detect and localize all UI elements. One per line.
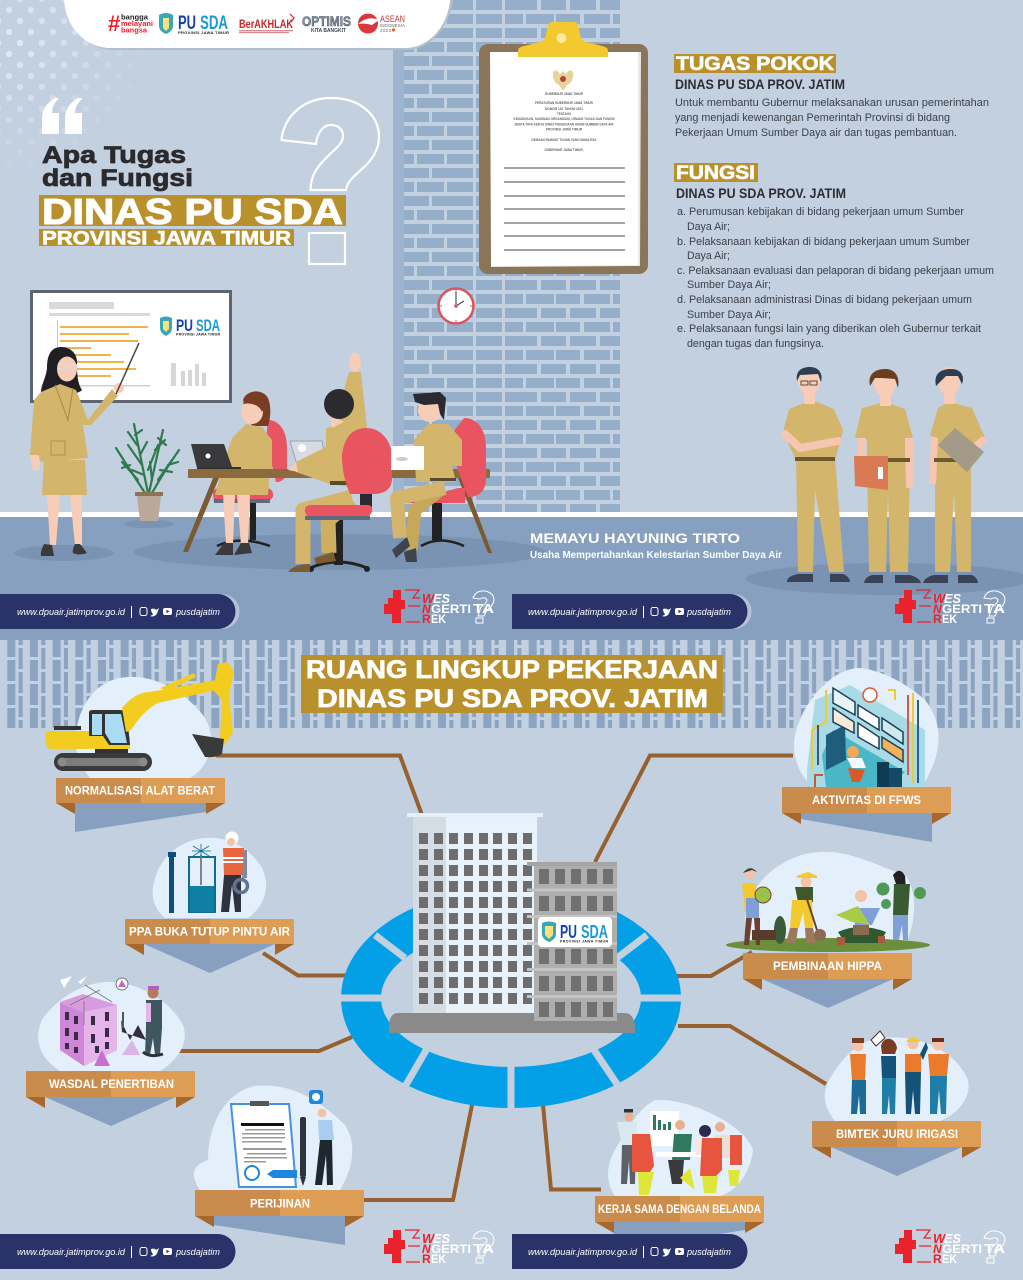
ribbon: Normalisasi Alat Berat: NORMALISASI ALAT BERAT: [65, 784, 216, 798]
footer bar: website and social, bottom left: pusdajatim: [175, 1247, 220, 1258]
title: Apa Tugas dan Fungsi: [42, 142, 193, 192]
icon: control room: [807, 685, 925, 787]
chair: [360, 490, 372, 507]
icon: outlined question mark: [282, 98, 379, 264]
officer with crossed arms: [783, 367, 850, 582]
campaign mark: Wes Ngerti Ta Rek, bottom right: TA: [984, 1241, 1006, 1256]
logo: bangga melayani bangsa: #: [108, 11, 120, 36]
campaign mark: Wes Ngerti Ta Rek, top right: GERTI: [942, 602, 982, 616]
PU SDA logo on board: PROVINSI JAWA TIMUR: [176, 332, 220, 336]
decree text: SERTA TATA KERJA DINAS PEKERJAAN UMUM SUMBER DAYA AIR: [514, 122, 614, 126]
slogan: Memayu Hayuning Tirto: MEMAYU HAYUNING TIRTO: [530, 530, 740, 546]
campaign mark: Wes Ngerti Ta Rek, bottom left: [384, 1230, 495, 1266]
text block: Fungsi list: e. Pelaksanaan fungsi lain yang diberikan oleh Gubernur terkait: [677, 323, 981, 335]
icon: wall clock: [438, 288, 474, 324]
campaign mark: Wes Ngerti Ta Rek, top right: W: [933, 591, 947, 606]
campaign mark: Wes Ngerti Ta Rek, top left: [384, 590, 495, 626]
item: Kerja Sama Dengan Belanda: [595, 1100, 764, 1234]
ribbon: Perijinan: [195, 1190, 364, 1245]
campaign mark: Wes Ngerti Ta Rek, top left: EK: [431, 612, 446, 626]
text block: Tugas Pokok description: Pekerjaan Umum Sumber Daya air dan tugas pembantuan.: [675, 127, 957, 139]
item: PPA Buka Tutup Pintu Air: [125, 832, 294, 973]
campaign mark: Wes Ngerti Ta Rek, bottom left: N: [422, 1242, 431, 1256]
slogan: Memayu Hayuning Tirto: Usaha Mempertahankan Kelestarian Sumber Daya Air: [530, 549, 782, 561]
item: Pembinaan HIPPA: [726, 852, 930, 1008]
text block: Tugas Pokok description: Untuk membantu Gubernur melaksanakan urusan pemerintahan: [675, 97, 989, 109]
item: Aktivitas di FFWS: [782, 685, 951, 842]
blob backdrop: [608, 1100, 753, 1196]
icon: document, pen and man: [231, 1090, 334, 1187]
ribbon: Bimtek Juru Irigasi: [812, 1121, 981, 1176]
campaign mark: Wes Ngerti Ta Rek, top left: GERTI: [431, 602, 471, 616]
campaign mark: Wes Ngerti Ta Rek, bottom right: EK: [942, 1252, 957, 1266]
title: Apa Tugas dan Fungsi: Apa Tugas: [42, 142, 186, 169]
logo: ASEAN Indonesia 2023: 2023: [380, 28, 391, 33]
footer bar: website and social, bottom left: [0, 1234, 236, 1269]
footer bar: website and social, bottom right: [512, 1234, 748, 1269]
campaign mark: Wes Ngerti Ta Rek, bottom left: ES: [433, 1231, 450, 1246]
ribbon: Kerja Sama Dengan Belanda: KERJA SAMA DENGAN BELANDA: [598, 1202, 761, 1216]
logo: PU SDA: [159, 13, 229, 35]
campaign mark: Wes Ngerti Ta Rek, bottom right: GERTI: [942, 1242, 982, 1256]
logo: bangga melayani bangsa: melayani: [121, 19, 153, 28]
icon: meeting scene: [617, 1109, 742, 1195]
blob: normalisasi backdrop: [76, 677, 211, 778]
figure: man raising hand in red chair: [288, 353, 392, 572]
floor with skirting: [0, 512, 1023, 640]
footer bar: website and social, top right: pusdajatim: [686, 607, 731, 618]
footer bar: website and social, bottom left: www.dpuair.jatimprov.go.id: [17, 1247, 126, 1258]
text block: Tugas Pokok description: yang menjadi kewenangan Pemerintah Provinsi di bidang: [675, 112, 950, 124]
heading: Tugas Pokok: TUGAS POKOK: [676, 53, 834, 75]
ribbon: Kerja Sama Dengan Belanda: [595, 1196, 764, 1234]
decree text: DENGAN RAHMAT TUHAN YANG MAHA ESA: [532, 138, 597, 142]
ribbon: Pembinaan HIPPA: [743, 953, 912, 1008]
text block: Fungsi list: Daya Air;: [687, 250, 730, 262]
plinth: [389, 1013, 635, 1033]
dotted halftone corner: [0, 0, 111, 145]
campaign mark: Wes Ngerti Ta Rek, top right: EK: [942, 612, 957, 626]
campaign mark: Wes Ngerti Ta Rek, bottom right: W: [933, 1231, 947, 1246]
ribbon: Wasdal Penertiban: WASDAL PENERTIBAN: [49, 1077, 174, 1091]
decree text: [514, 92, 614, 152]
footer bar: website and social, top right: www.dpuair.jatimprov.go.id: [528, 607, 638, 618]
text block: Fungsi list: c. Pelaksanaan evaluasi dan pelaporan di bidang pekerjaan umum: [677, 265, 994, 277]
blue segmented ring: [335, 888, 687, 1115]
PU SDA logo on board: [160, 316, 220, 336]
campaign mark: Wes Ngerti Ta Rek, top left: ES: [433, 591, 450, 606]
ribbon: PPA Buka Tutup Pintu Air: PPA BUKA TUTUP PINTU AIR: [129, 924, 290, 938]
laptop: [191, 444, 232, 468]
logo: ASEAN Indonesia 2023: [358, 14, 405, 34]
quotation mark: [42, 98, 83, 134]
campaign mark: Wes Ngerti Ta Rek, bottom right: N: [933, 1242, 942, 1256]
ribbon: Pembinaan HIPPA: PEMBINAAN HIPPA: [773, 959, 882, 973]
ribbon: Aktivitas di FFWS: AKTIVITAS DI FFWS: [812, 793, 921, 807]
campaign mark: Wes Ngerti Ta Rek, bottom right: [895, 1230, 1006, 1266]
decree text: GUBERNUR JAWA TIMUR: [545, 92, 583, 96]
figure group: three standing officers: [783, 367, 988, 583]
building sign: PU SDA: PU: [560, 922, 577, 942]
logo: Optimis: [302, 13, 351, 34]
building sign: PU SDA: PROVINSI JAWA TIMUR: [560, 940, 608, 944]
decree text: PROVINSI JAWA TIMUR: [546, 128, 582, 132]
logo: bangga melayani bangsa: bangsa: [121, 26, 148, 34]
bar lines chart: [57, 320, 148, 385]
document rules: [504, 168, 625, 250]
icon: damaged building and worker: [60, 976, 163, 1066]
footer bar: website and social, top left: www.dpuair.jatimprov.go.id: [17, 607, 126, 618]
blob backdrop: [825, 1037, 969, 1121]
header logo strip: [64, 0, 453, 50]
text block: Fungsi list: Sumber Daya Air;: [687, 279, 771, 291]
campaign mark: Wes Ngerti Ta Rek, top left: TA: [473, 601, 495, 616]
campaign mark: Wes Ngerti Ta Rek, top right: R: [933, 612, 942, 626]
campaign mark: Wes Ngerti Ta Rek, top right: N: [933, 602, 942, 616]
text block: Fungsi list: a. Perumusan kebijakan di bidang pekerjaan umum Sumber: [677, 206, 964, 218]
figure: seated man with laptop: [391, 392, 486, 562]
ribbon: Normalisasi Alat Berat: [56, 778, 225, 832]
ribbon: Perijinan: PERIJINAN: [250, 1196, 310, 1210]
ribbon: PPA Buka Tutup Pintu Air: [125, 919, 294, 973]
icon: water gate and worker: [168, 832, 248, 913]
item: Bimtek Juru Irigasi: [812, 1031, 981, 1176]
campaign mark: Wes Ngerti Ta Rek, top left: N: [422, 602, 431, 616]
blob backdrop: [38, 982, 185, 1071]
title highlight: PROVINSI JAWA TIMUR: PROVINSI JAWA TIMUR: [42, 228, 291, 250]
campaign mark: Wes Ngerti Ta Rek, bottom left: TA: [473, 1241, 495, 1256]
logo: PU SDA: PROVINSI JAWA TIMUR: [178, 30, 229, 35]
logo: Optimis: OPTIMIS: [302, 13, 351, 29]
item: Wasdal Penertiban: [26, 976, 195, 1126]
text block: Fungsi list: Sumber Daya Air;: [687, 309, 771, 321]
connector lines to central building: [178, 756, 826, 1200]
item: Normalisasi Alat Berat: [45, 662, 234, 832]
campaign mark: Wes Ngerti Ta Rek, top right: TA: [984, 601, 1006, 616]
lower section vertical brick band: [0, 640, 1023, 728]
presentation whiteboard: [32, 292, 230, 402]
annex block: [534, 864, 617, 1021]
footer bar: website and social, bottom right: pusdajatim: [686, 1247, 731, 1258]
decree text: PERATURAN GUBERNUR JAWA TIMUR: [535, 101, 593, 105]
figure: seated woman with laptop: [191, 391, 287, 555]
logo: bangga melayani bangsa: bangga: [121, 12, 149, 22]
footer bar: website and social, top right: [512, 594, 752, 629]
logo: bangga melayani bangsa: [108, 11, 153, 36]
small grey bar chart: [171, 363, 206, 386]
campaign mark: Wes Ngerti Ta Rek, bottom left: EK: [431, 1252, 446, 1266]
logo: ASEAN Indonesia 2023: INDONESIA: [380, 23, 405, 28]
item: Perijinan: [194, 1085, 364, 1245]
raised arm and torso: [334, 372, 367, 428]
subheading: Dinas PU SDA Prov. Jatim: DINAS PU SDA PROV. JATIM: [676, 185, 846, 201]
campaign mark: Wes Ngerti Ta Rek, bottom left: GERTI: [431, 1242, 471, 1256]
campaign mark: Wes Ngerti Ta Rek, top right: [895, 590, 1006, 626]
text block: Fungsi list: Daya Air;: [687, 221, 730, 233]
officer with tablet: [923, 367, 988, 583]
icon: excavator: [45, 662, 234, 771]
tower windows: [419, 833, 532, 1004]
footer bar: website and social, top left: [0, 594, 240, 629]
logo: ASEAN Indonesia 2023: ASEAN: [380, 14, 405, 24]
text block: Tugas Pokok description: [675, 97, 989, 139]
decree text: NOMOR 102 TAHUN 2021: [545, 107, 583, 111]
PU SDA logo on board: PU: [176, 316, 193, 335]
text block: Fungsi list: [677, 206, 994, 350]
clipboard with decree document: [479, 22, 648, 274]
blob backdrop: [153, 838, 266, 918]
campaign mark: Wes Ngerti Ta Rek, top left: W: [422, 591, 436, 606]
ribbon: Bimtek Juru Irigasi: BIMTEK JURU IRIGASI: [836, 1127, 958, 1141]
campaign mark: Wes Ngerti Ta Rek, bottom left: R: [422, 1252, 431, 1266]
icon: four engineers: [850, 1031, 949, 1114]
heading: Fungsi: FUNGSI: [676, 162, 755, 184]
title: Ruang Lingkup Pekerjaan: DINAS PU SDA PROV. JATIM: [317, 685, 708, 713]
building sign: PU SDA: SDA: [581, 922, 608, 942]
logo: PU SDA: PU: [178, 13, 196, 34]
campaign mark: Wes Ngerti Ta Rek, bottom right: ES: [944, 1231, 961, 1246]
icon: potted plant: [116, 424, 179, 521]
ribbon: Wasdal Penertiban: [26, 1071, 195, 1126]
blob: aktivitas backdrop: [794, 668, 939, 787]
subheading: Dinas PU SDA Prov. Jatim: DINAS PU SDA PROV. JATIM: [675, 76, 845, 92]
text block: Fungsi list: dengan tugas dan fungsinya.: [687, 338, 824, 350]
logo: BerAKHLAK: [239, 14, 294, 33]
figure: presenter woman: [30, 343, 139, 556]
ribbon: Aktivitas di FFWS: [782, 787, 951, 842]
campaign mark: Wes Ngerti Ta Rek, top left: R: [422, 612, 431, 626]
central building: [389, 813, 635, 1033]
slogan: Memayu Hayuning Tirto: [530, 530, 782, 561]
title: Ruang Lingkup Pekerjaan: RUANG LINGKUP PEKERJAAN: [306, 656, 718, 684]
text block: Fungsi list: b. Pelaksanaan kebijakan di bidang pekerjaan umum Sumber: [677, 236, 970, 248]
brick wall column: [393, 0, 620, 512]
PU SDA logo on board: SDA: [196, 316, 220, 335]
blob backdrop: [194, 1085, 352, 1190]
text block: Fungsi list: d. Pelaksanaan administrasi Dinas di bidang pekerjaan umum: [677, 294, 972, 306]
title: Ruang Lingkup Pekerjaan: [301, 655, 723, 713]
title: Apa Tugas dan Fungsi: dan Fungsi: [42, 165, 193, 192]
decree text: TENTANG: [557, 112, 571, 116]
icon: clip: [518, 22, 608, 57]
campaign mark: Wes Ngerti Ta Rek, bottom left: W: [422, 1231, 436, 1246]
officer with orange folder: [854, 369, 921, 583]
table: [183, 469, 492, 553]
campaign mark: Wes Ngerti Ta Rek, top right: ES: [944, 591, 961, 606]
campaign mark: Wes Ngerti Ta Rek, bottom right: R: [933, 1252, 942, 1266]
decree text: GUBERNUR JAWA TIMUR,: [544, 148, 584, 152]
legs: [328, 500, 352, 553]
logo: BerAKHLAK: BerAKHLAK: [239, 19, 294, 31]
icon: garuda emblem: [553, 70, 573, 91]
logo: Optimis: KITA BANGKIT: [311, 28, 347, 34]
blob backdrop: [745, 852, 914, 945]
icon: gardening scene: [726, 868, 930, 952]
logo: PU SDA: SDA: [200, 13, 228, 34]
decree text: KEDUDUKAN, SUSUNAN ORGANISASI, URAIAN TUGAS DAN FUNGSI: [514, 117, 614, 121]
building sign: PU SDA: [538, 917, 612, 947]
footer bar: website and social, top left: pusdajatim: [175, 607, 220, 618]
footer bar: website and social, bottom right: www.dpuair.jatimprov.go.id: [528, 1247, 638, 1258]
title highlight: DINAS PU SDA: DINAS PU SDA: [42, 191, 343, 232]
